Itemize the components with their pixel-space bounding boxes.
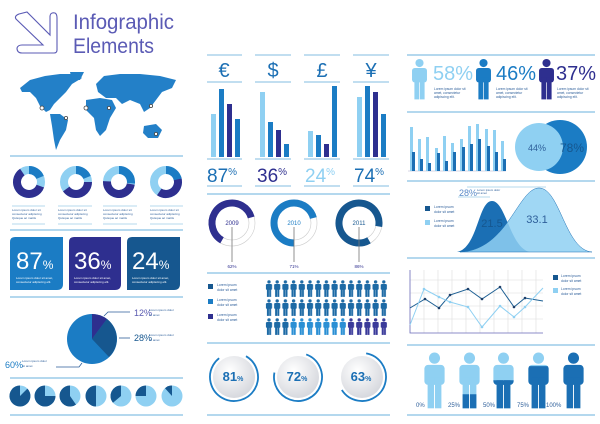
percentage boxes: consectetur adipiscing elit. xyxy=(16,280,51,284)
people progress row: 0% xyxy=(416,403,425,409)
people percent stats: adipiscing elit. xyxy=(557,95,578,99)
percentage boxes: Lorem ipsum dolor sit amet, xyxy=(74,276,111,280)
donut charts row: Quisque ac mattis xyxy=(150,216,175,220)
bell curves: Lorem ipsum xyxy=(434,205,454,209)
title: Infographic xyxy=(73,11,174,34)
world map xyxy=(20,72,176,150)
pie chart with callouts: 12% xyxy=(134,308,152,318)
legend: people grid: Lorem ipsum xyxy=(217,298,237,302)
pie chart with callouts: sit amet xyxy=(149,313,160,317)
people percent stats: 58% xyxy=(433,63,473,85)
people progress row: 25% xyxy=(448,403,461,409)
year ring charts: 2011 xyxy=(353,221,366,227)
legend: people grid: dolor sit amet xyxy=(217,303,237,307)
donut charts row: consectetur adipiscing xyxy=(103,212,133,216)
people progress row: 50% xyxy=(483,403,496,409)
people percent stats: Lorem ipsum dolor sit xyxy=(557,87,589,91)
bell curves: dolor sit amet xyxy=(434,224,454,228)
line chart: Lorem ipsum xyxy=(561,287,581,291)
year ring charts: 2009 xyxy=(225,221,239,227)
currency bar charts: 36 xyxy=(257,166,278,187)
year ring charts: 2010 xyxy=(287,221,301,227)
year ring charts xyxy=(205,196,386,269)
donut charts row xyxy=(12,167,183,224)
donut charts row: Quisque ac mattis xyxy=(12,216,37,220)
people percent stats: amet, consectetur xyxy=(434,91,461,95)
donut charts row: consectetur adipiscing xyxy=(150,212,180,216)
currency bar charts: % xyxy=(326,167,335,178)
people percent stats: 46% xyxy=(496,63,536,85)
bell curves: 28% xyxy=(459,188,477,198)
legend: people grid xyxy=(208,283,237,322)
percentage boxes: 36% xyxy=(74,248,112,275)
gauges: 72% xyxy=(287,369,308,384)
percentage boxes: consectetur adipiscing elit. xyxy=(132,280,167,284)
venn diagram: 78% xyxy=(560,141,584,155)
bell curves: 21.5 xyxy=(481,218,503,230)
bell curves: sit amet xyxy=(477,191,487,195)
currency bar charts: £ xyxy=(316,60,328,82)
people percent stats: Lorem ipsum dolor sit xyxy=(434,87,466,91)
legend: people grid: dolor sit amet xyxy=(217,288,237,292)
people percent stats: 37% xyxy=(556,63,596,85)
percentage boxes: 24% xyxy=(132,248,170,275)
people percent stats: amet, consectetur xyxy=(496,91,523,95)
small pies row xyxy=(9,385,183,406)
gauges: 63% xyxy=(351,369,372,384)
currency bar charts: % xyxy=(375,167,384,178)
donut charts row: Quisque ac mattis xyxy=(103,216,128,220)
donut charts row: Lorem ipsum dolor sit xyxy=(103,208,132,212)
bell curves: Lorem ipsum dolor xyxy=(477,188,500,192)
people percent stats: Lorem ipsum dolor sit xyxy=(496,87,528,91)
legend: people grid: dolor sit amet xyxy=(217,318,237,322)
donut charts row: consectetur adipiscing xyxy=(58,212,88,216)
legend: people grid: Lorem ipsum xyxy=(217,313,237,317)
pie chart with callouts xyxy=(5,308,174,370)
pie chart with callouts: Lorem ipsum dolor xyxy=(22,359,47,363)
percentage boxes xyxy=(10,237,180,290)
pie chart with callouts: Lorem ipsum dolor xyxy=(149,308,174,312)
percentage boxes: Lorem ipsum dolor sit amet, xyxy=(132,276,169,280)
donut charts row: consectetur adipiscing xyxy=(12,212,42,216)
people grid xyxy=(265,280,388,337)
icon: arrow xyxy=(15,12,57,53)
pie chart with callouts: Lorem ipsum dolor xyxy=(149,333,174,337)
currency bar charts: 74 xyxy=(354,166,375,187)
percentage boxes: consectetur adipiscing elit. xyxy=(74,280,109,284)
currency bar charts: $ xyxy=(267,60,279,82)
title xyxy=(15,11,174,58)
percentage boxes: Lorem ipsum dolor sit amet, xyxy=(16,276,53,280)
pie chart with callouts: 60% xyxy=(5,360,23,370)
bell curves: dolor sit amet xyxy=(434,210,454,214)
line chart: dolor sit amet xyxy=(561,292,581,296)
venn diagram: 44% xyxy=(528,143,546,153)
people percent stats: adipiscing elit. xyxy=(434,95,455,99)
currency bar charts: 24 xyxy=(305,166,326,187)
people percent stats: adipiscing elit. xyxy=(496,95,517,99)
venn diagram xyxy=(515,120,587,174)
donut charts row: Lorem ipsum dolor sit xyxy=(58,208,87,212)
title: Elements xyxy=(73,35,154,58)
pie chart with callouts: 28% xyxy=(134,333,152,343)
bell curves xyxy=(425,187,592,252)
people progress row: 100% xyxy=(546,403,562,409)
donut charts row: Lorem ipsum dolor sit xyxy=(12,208,41,212)
year ring charts: 71% xyxy=(289,264,299,269)
bell curves: Lorem ipsum xyxy=(434,219,454,223)
people progress row: 75% xyxy=(517,403,530,409)
currency bar charts: % xyxy=(278,167,287,178)
pie chart with callouts: sit amet xyxy=(149,338,160,342)
currency bar charts xyxy=(207,55,389,187)
year ring charts: 62% xyxy=(227,264,237,269)
currency bar charts: % xyxy=(228,167,237,178)
currency bar charts: 87 xyxy=(207,166,228,187)
line chart: Lorem ipsum xyxy=(561,274,581,278)
people percent stats: amet, consectetur xyxy=(557,91,584,95)
currency bar charts: € xyxy=(218,60,230,82)
bell curves: 33.1 xyxy=(526,214,548,226)
donut charts row: Quisque ac mattis xyxy=(58,216,83,220)
gauges xyxy=(201,344,390,410)
gauges: 81% xyxy=(223,369,244,384)
donut charts row: Lorem ipsum dolor sit xyxy=(150,208,179,212)
year ring charts: 86% xyxy=(354,264,364,269)
people percent stats xyxy=(412,59,596,99)
pie chart with callouts: sit amet xyxy=(22,364,33,368)
currency bar charts: ¥ xyxy=(364,60,377,82)
percentage boxes: 87% xyxy=(16,248,54,275)
people progress row xyxy=(416,352,584,409)
line chart: dolor sit amet xyxy=(561,279,581,283)
line chart xyxy=(410,270,581,333)
legend: people grid: Lorem ipsum xyxy=(217,283,237,287)
monthly bar chart xyxy=(408,124,506,171)
